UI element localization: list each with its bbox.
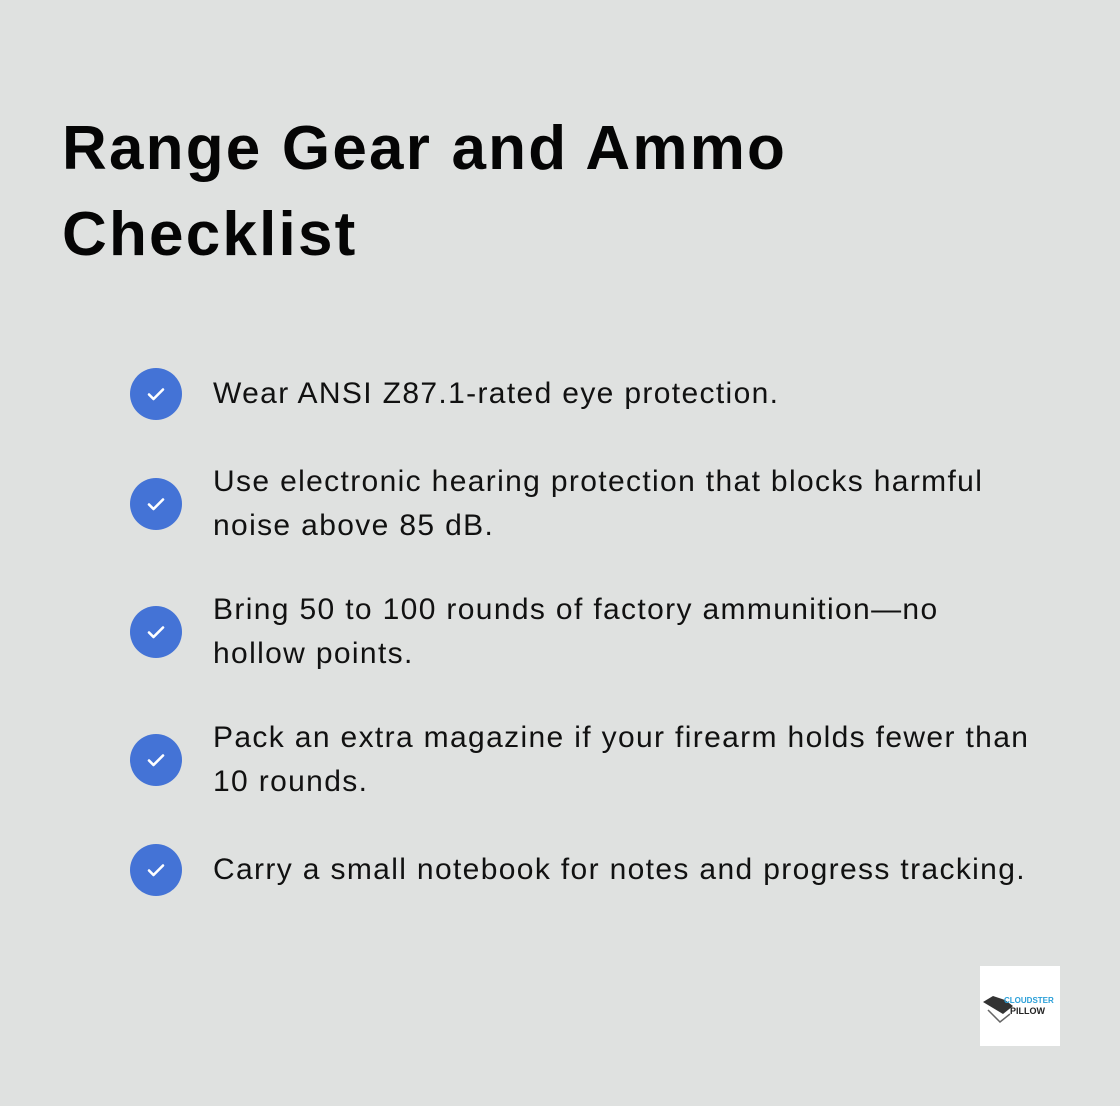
logo: [980, 966, 1060, 1046]
icon: check: [130, 478, 182, 530]
text: [213, 721, 1029, 798]
item 2: [130, 465, 983, 542]
text: Use electronic hearing protection that blocks harmful: [213, 465, 983, 498]
title: [62, 114, 787, 269]
item 4: [130, 721, 1029, 798]
text: Bring 50 to 100 rounds of factory ammunition—no: [213, 593, 938, 626]
title: Checklist: [62, 200, 357, 269]
title: Range Gear and Ammo: [62, 114, 787, 183]
text: Wear ANSI Z87.1-rated eye protection.: [213, 377, 779, 410]
icon: check: [130, 844, 182, 896]
text: Pack an extra magazine if your firearm holds fewer than: [213, 721, 1029, 754]
item 3: [130, 593, 938, 670]
logo: CLOUDSTER: [1004, 996, 1054, 1005]
text: [213, 465, 983, 542]
logo: PILLOW: [1010, 1006, 1045, 1016]
icon: check: [130, 368, 182, 420]
item 5: [130, 844, 1026, 896]
text: hollow points.: [213, 637, 414, 670]
text: 10 rounds.: [213, 765, 368, 798]
text: [213, 593, 938, 670]
text: noise above 85 dB.: [213, 509, 494, 542]
icon: check: [130, 606, 182, 658]
text: Carry a small notebook for notes and progress tracking.: [213, 853, 1026, 886]
icon: check: [130, 734, 182, 786]
item 1: [130, 368, 779, 420]
